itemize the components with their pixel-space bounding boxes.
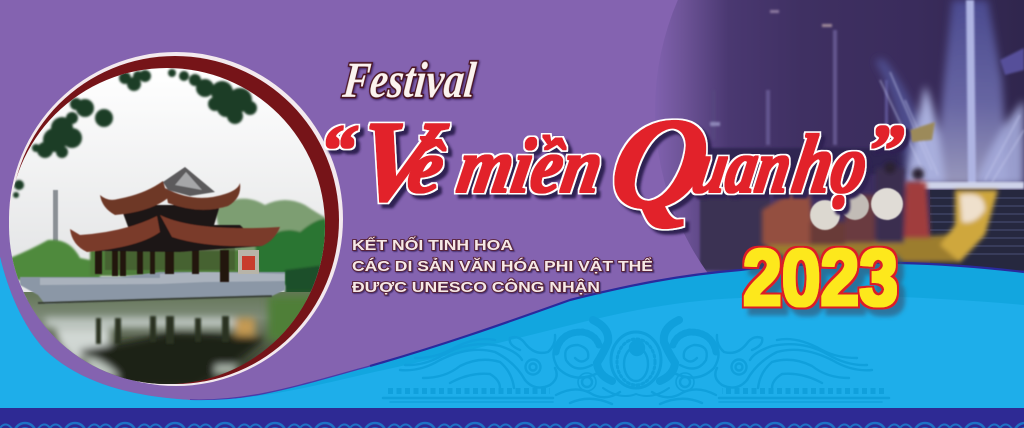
- right dragon: [652, 320, 889, 404]
- fountain basin rim: [920, 182, 1024, 189]
- water: [930, 190, 1024, 270]
- bottom patterned band: [0, 408, 1024, 428]
- main title: ề: [402, 125, 451, 209]
- night photo: fountain and quan ho performers: [661, 0, 1024, 272]
- main title: [303, 92, 912, 236]
- subtitle line 1: KẾT NỐI TINH HOA: [352, 236, 513, 254]
- pavilion: [70, 167, 280, 282]
- tower: [53, 190, 58, 242]
- center oval: [603, 332, 669, 396]
- main title: Q: [600, 92, 720, 236]
- year 2023: 2023: [743, 233, 898, 322]
- lower roof: [70, 216, 160, 252]
- circular frame: [9, 52, 343, 386]
- main title: ”: [858, 109, 909, 190]
- upper body: [122, 204, 220, 228]
- quan ho drums: [810, 188, 903, 230]
- blue wave: [0, 257, 1024, 428]
- stone platform: [20, 272, 285, 304]
- festival label: Festival: [340, 52, 479, 109]
- main title: uan: [687, 125, 798, 209]
- pond reflection: [45, 296, 328, 388]
- left dragon: [383, 320, 620, 404]
- city lights and poles: [699, 8, 904, 271]
- pagoda photo: [9, 68, 325, 384]
- overhanging leaves: [13, 69, 257, 198]
- main title: V: [346, 98, 454, 226]
- red banner: [238, 250, 259, 274]
- main title: “: [311, 109, 362, 190]
- upper roof: [100, 181, 168, 215]
- main title: họ: [787, 119, 875, 211]
- subtitle line 3: ĐƯỢC UNESCO CÔNG NHẬN: [352, 278, 600, 296]
- subtitle line 2: CÁC DI SẢN VĂN HÓA PHI VẬT THỂ: [352, 257, 653, 275]
- pond: [24, 292, 310, 384]
- main title: miền: [452, 124, 609, 210]
- columns: [94, 248, 236, 283]
- fountain: [876, 0, 1024, 185]
- fountain central jet: [880, 0, 1024, 185]
- ornament: twin dragons around a pearl: [383, 320, 889, 404]
- subtitle: [352, 236, 653, 296]
- pond reflected columns: [96, 316, 229, 344]
- dragon boat: [762, 162, 998, 262]
- lighter wave band: [0, 257, 1024, 428]
- far trees: [10, 199, 330, 300]
